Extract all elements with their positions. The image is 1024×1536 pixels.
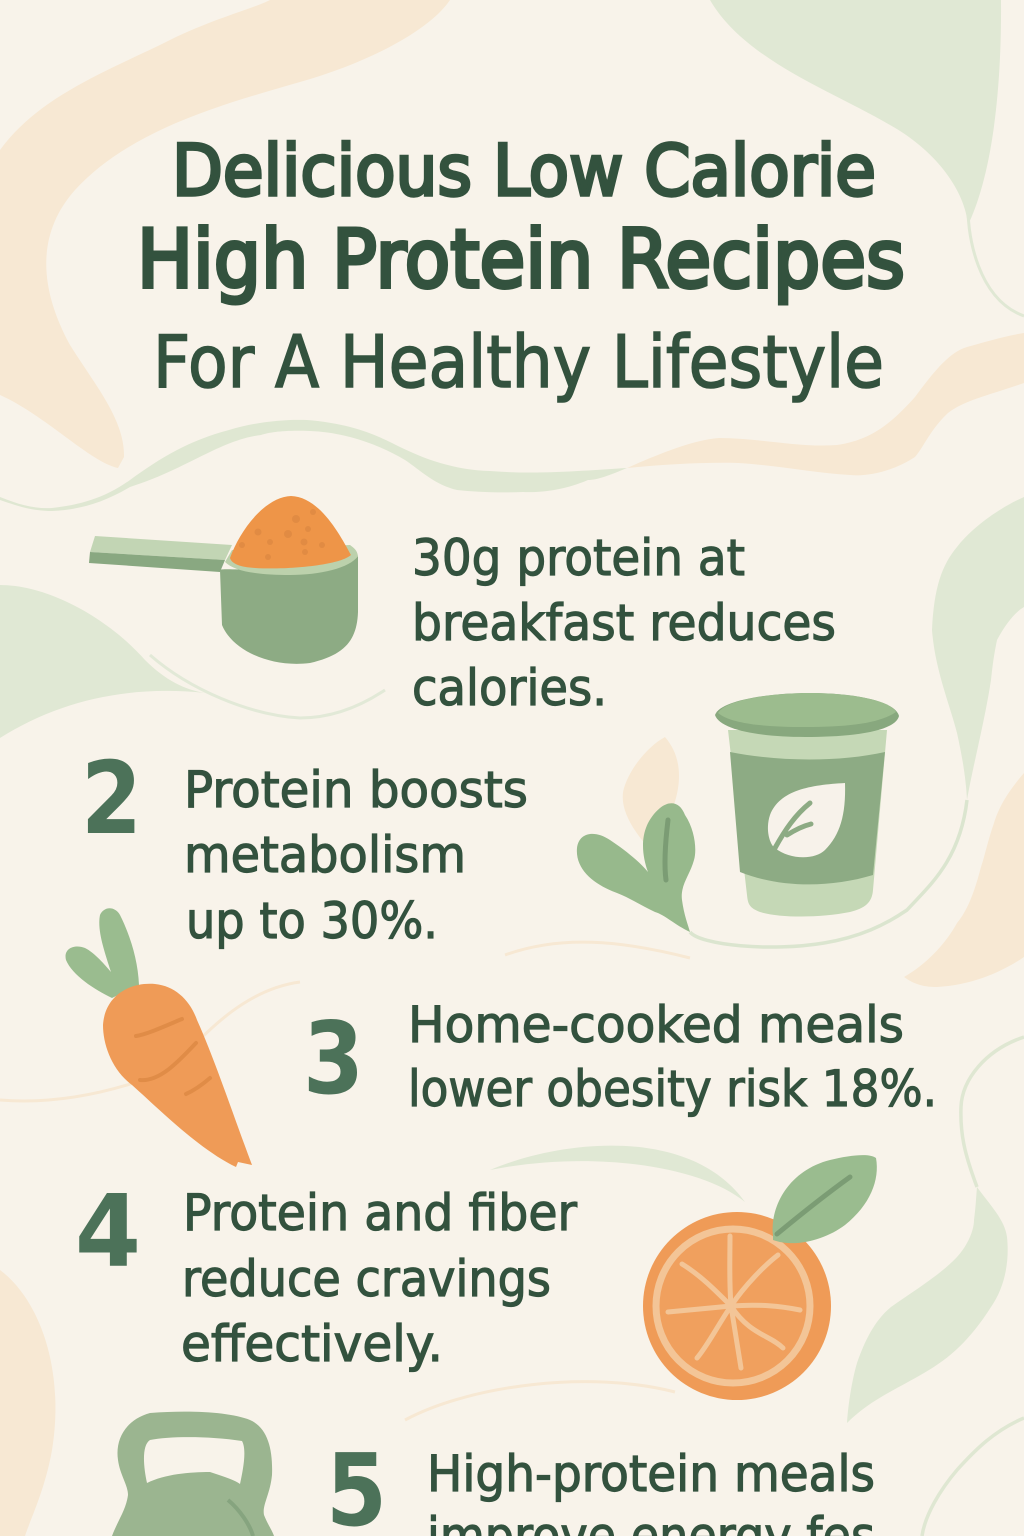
number 2: 2 bbox=[81, 740, 142, 857]
text: fact 2: Protein boosts bbox=[184, 761, 528, 819]
text: fact 2 bbox=[184, 761, 528, 950]
background: green ribbon right bbox=[690, 497, 1024, 947]
text: fact 2: metabolism bbox=[184, 826, 466, 884]
background: green wave under title bbox=[0, 420, 627, 511]
text: fact 1 bbox=[412, 529, 836, 717]
text: fact 4 bbox=[181, 1184, 577, 1373]
icon: orange bbox=[643, 1155, 877, 1400]
text: fact 3: Home-cooked meals bbox=[408, 996, 904, 1054]
title: High Protein Recipes bbox=[137, 213, 905, 306]
text: fact 3: lower obesity risk 18%. bbox=[408, 1060, 937, 1118]
text: fact 3 bbox=[408, 996, 937, 1118]
text: fact 4: effectively. bbox=[181, 1315, 443, 1373]
text: fact 5 bbox=[427, 1445, 875, 1536]
text: fact 2: up to 30%. bbox=[186, 892, 438, 950]
icon: yogurt cup bbox=[715, 693, 899, 916]
background: green leaf mid left bbox=[0, 585, 385, 738]
background: peach wave right of title bbox=[627, 333, 1024, 475]
powder speckles bbox=[239, 509, 325, 560]
title: Delicious Low Calorie bbox=[172, 130, 876, 212]
text: fact 1: 30g protein at bbox=[412, 529, 745, 587]
text: fact 1: breakfast reduces bbox=[412, 594, 836, 652]
title: For A Healthy Lifestyle bbox=[153, 320, 884, 404]
background: faint lines and leaves bbox=[0, 942, 1024, 1536]
background: peach swirl top left bbox=[0, 0, 450, 468]
icon: green sprout bbox=[577, 803, 695, 932]
background: green leaf top right bbox=[710, 0, 1024, 316]
number 3: 3 bbox=[303, 1000, 364, 1117]
text: fact 5: High-protein meals bbox=[427, 1445, 875, 1503]
icon: carrot bbox=[66, 908, 252, 1167]
icon: protein scoop bbox=[89, 496, 358, 664]
title bbox=[137, 130, 905, 404]
number 4: 4 bbox=[75, 1173, 141, 1290]
text: fact 4: reduce cravings bbox=[182, 1250, 551, 1308]
background: peach shape right bbox=[904, 773, 1024, 987]
icon: kettlebell bbox=[112, 1412, 274, 1536]
text: fact 4: Protein and fiber bbox=[183, 1184, 577, 1242]
text: fact 1: calories. bbox=[412, 659, 607, 717]
icon: peach leaf behind sprout bbox=[623, 737, 679, 860]
